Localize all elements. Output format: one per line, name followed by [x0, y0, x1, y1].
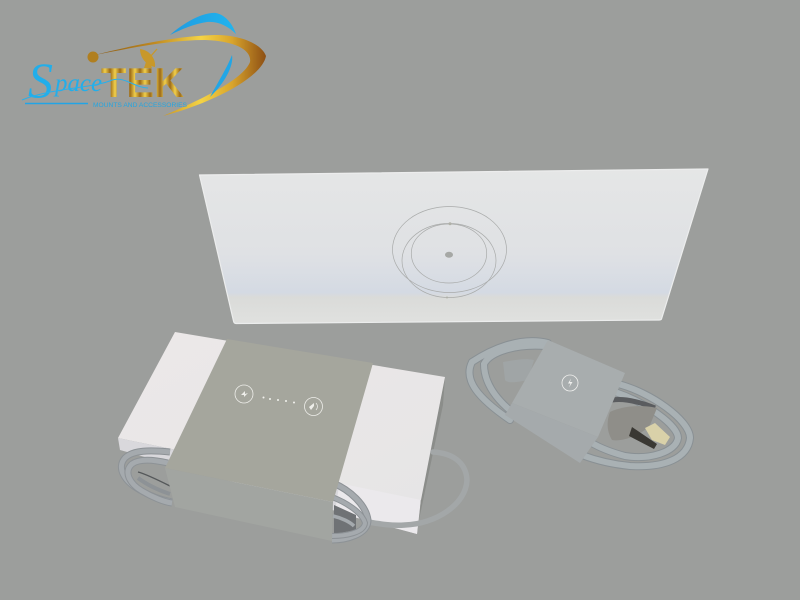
logo blue inner swoosh [210, 55, 232, 97]
right cable coil [332, 483, 368, 540]
sleeve top [512, 340, 625, 437]
plate center dot [445, 252, 453, 258]
wall plate [200, 169, 708, 324]
IEC connector [503, 359, 534, 382]
logo TEK wordmark: TEK [101, 59, 184, 106]
logo Space script [28, 52, 102, 108]
cord sleeve [505, 340, 625, 463]
sleeve bolt icon [562, 375, 578, 391]
power supply box [118, 332, 467, 541]
plate body [200, 169, 708, 324]
logo gold orbit [95, 35, 266, 116]
cord loops [469, 341, 690, 466]
logo Space script: pace [53, 70, 102, 97]
logo: SpaceTEK [22, 13, 266, 116]
sleeve front [505, 403, 598, 463]
logo gold satellite ball [88, 52, 98, 62]
box right side [419, 377, 445, 520]
power cord bundle [469, 340, 690, 466]
sleeve top [165, 339, 373, 502]
logo blue swoosh [170, 13, 236, 35]
sleeve icon right [304, 398, 322, 416]
logo underline [25, 102, 88, 104]
plate marker dots [448, 222, 452, 225]
plug body [608, 406, 657, 440]
box top face [118, 332, 445, 500]
sleeve front [165, 468, 333, 541]
rear power cable [368, 452, 467, 525]
logo satellite dish [140, 49, 157, 68]
logo Space script: S [28, 52, 53, 108]
sleeve icon left [235, 385, 253, 403]
logo tagline: MOUNTS AND ACCESSORIES [93, 102, 188, 109]
plug pins [629, 423, 670, 449]
box front face [118, 438, 420, 534]
left cable coil [121, 451, 172, 503]
sleeve dots [262, 396, 295, 404]
plate circles [392, 206, 506, 298]
box sleeve [165, 339, 373, 541]
plug dark cable [612, 399, 655, 408]
logo blue wave [22, 79, 148, 100]
